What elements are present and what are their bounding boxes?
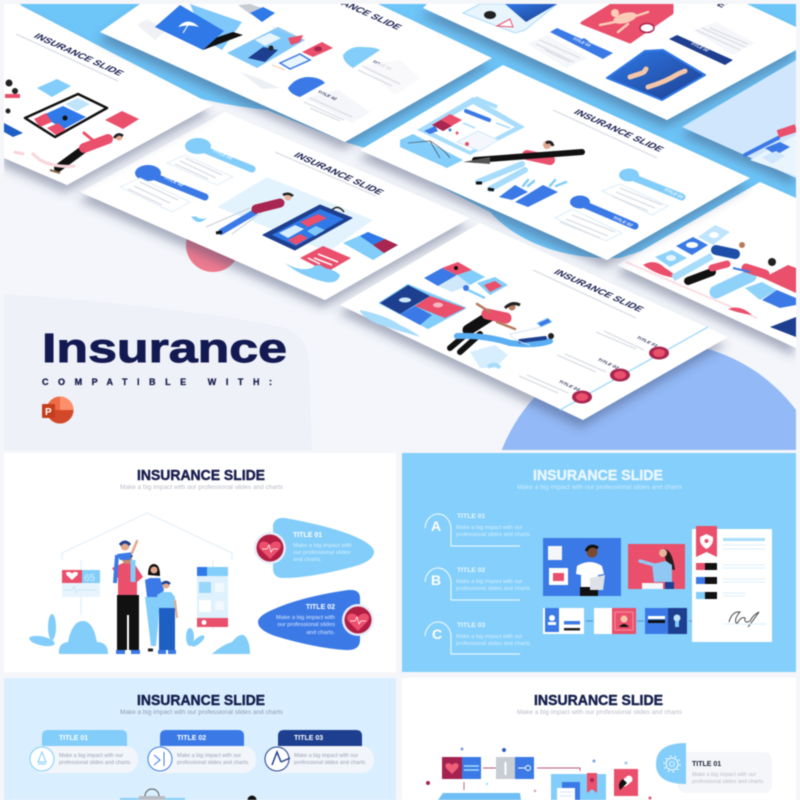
item C: Make a big impact with our [456, 634, 523, 640]
title 01 callout: TITLE 01 [293, 532, 322, 539]
plants [28, 614, 250, 654]
blue hands tile [607, 50, 705, 100]
icon tiles [655, 225, 730, 267]
light blue title bar: TITLE 01 [661, 188, 685, 200]
item B: B [431, 572, 441, 588]
hero panel [3, 3, 797, 451]
slide card: pale blue [682, 60, 796, 178]
right tiles [343, 232, 398, 260]
pink circle [186, 238, 236, 273]
folder with umbrella [155, 4, 243, 50]
title 02 block: TITLE 02 [316, 90, 339, 101]
blue title bar [555, 196, 635, 241]
card title 01: professional slides and charts. [59, 760, 132, 766]
card title 03: Make a big impact with our [294, 753, 358, 759]
signature strip [400, 134, 463, 168]
house outline [62, 513, 232, 630]
card heading: INSURANCE SLIDE [291, 151, 386, 197]
title 01 block: TITLE 01 [692, 761, 721, 768]
timeline: TITLE 03 [556, 380, 581, 392]
title 02 callout [258, 590, 374, 650]
item C [425, 622, 532, 654]
timeline [519, 327, 708, 410]
title 01 block: professional slides and charts. [692, 779, 765, 785]
blue title bar: TITLE 02 [610, 216, 634, 228]
ribbon and tiles [272, 35, 333, 70]
slide card: family tiles [617, 182, 796, 348]
family [112, 541, 177, 654]
title 01 block: Make a big impact with our [692, 772, 756, 778]
icon: gear [664, 756, 680, 772]
small tile cluster [424, 262, 508, 298]
slide: white flow [402, 675, 796, 800]
cloud and sprout [192, 217, 340, 282]
slide card: umbrella folder [100, 0, 492, 142]
navy title bar block: TITLE 02 [689, 42, 711, 52]
card title 02: TITLE 02 [177, 735, 206, 742]
pale title backdrop [4, 294, 312, 450]
title 01 callout: and charts. [293, 557, 322, 563]
slide card: phone and woman [4, 4, 213, 185]
main title: Insurance [42, 325, 287, 371]
timeline: TITLE 02 [595, 358, 620, 370]
signature [724, 612, 766, 627]
slide subheading: Make a big impact with our professional slides and charts [120, 709, 283, 716]
form [417, 97, 525, 155]
blue title bar block [528, 28, 613, 68]
title 01 block [343, 47, 420, 95]
clipboard [263, 205, 352, 250]
large tile cluster [380, 285, 465, 328]
cloud [360, 310, 420, 337]
icon: PowerPoint: P [45, 407, 52, 418]
figure head [248, 796, 256, 800]
phone [25, 94, 107, 137]
warning tile [463, 4, 557, 33]
item B: professional slides and charts. [456, 586, 532, 592]
card title 03: professional slides and charts. [294, 760, 367, 766]
pink squiggle [14, 152, 75, 166]
side figures [5, 80, 20, 114]
right tiles [745, 265, 796, 337]
blue title bar: TITLE 02 [161, 176, 185, 188]
process tiles [543, 608, 709, 634]
blue tile [37, 79, 71, 97]
title 02 callout: Make a big impact with [276, 615, 335, 621]
small top tiles [238, 4, 275, 22]
slide: three titles [4, 678, 396, 800]
icon: heart badge 1 [254, 532, 286, 564]
node 1 [649, 346, 669, 360]
item A [425, 513, 532, 546]
item C: C [432, 626, 442, 642]
shield ribbon [696, 526, 717, 557]
child on shoulders [115, 541, 137, 583]
couple figures [673, 242, 776, 292]
card heading: INSURANCE SLIDE [31, 32, 126, 78]
patient in chair [457, 318, 554, 368]
light blue title bar [602, 168, 685, 215]
man with pen [463, 141, 582, 190]
grey shadow block [138, 20, 164, 40]
title 01 block: TITLE 01 [371, 60, 394, 71]
mother [145, 564, 164, 650]
title 02 callout: and charts. [306, 630, 335, 636]
folder top [438, 793, 521, 800]
slide card: crutches and clipboard [80, 112, 470, 300]
standing woman [50, 133, 123, 173]
title 02 callout: our professional slides [277, 622, 335, 628]
slide heading: INSURANCE SLIDE [533, 467, 663, 484]
card heading: INSURANCE SLIDE [551, 268, 646, 314]
gift boxes [499, 180, 566, 207]
item A: professional slides and charts. [456, 532, 532, 538]
card title 03: TITLE 03 [294, 735, 323, 742]
light blue title bar [167, 138, 252, 185]
red heart tile [105, 111, 139, 129]
app widget [197, 567, 228, 627]
item B: Make a big impact with our [456, 579, 523, 585]
icon: PowerPoint [42, 396, 74, 424]
slide card: pen signature [360, 65, 750, 260]
tile: plus [697, 614, 709, 627]
scattered dots [426, 748, 652, 800]
node 2 [610, 368, 630, 382]
slide card: dentist timeline [340, 223, 728, 420]
pink ground [626, 262, 757, 318]
heart card tile [442, 757, 481, 779]
card title 02: Make a big impact with our [177, 753, 241, 759]
blue title bar [120, 165, 205, 212]
item B: TITLE 02 [457, 567, 486, 574]
item B [425, 567, 532, 600]
tile: face scan [594, 608, 636, 634]
node 3 [572, 390, 592, 404]
card title 01: Make a big impact with our [59, 753, 123, 759]
slide: process blue [402, 453, 796, 672]
title 01 callout: Make a big impact with [293, 543, 352, 549]
heart monitor widget: 65 [84, 573, 96, 584]
slide heading: INSURANCE SLIDE [137, 692, 265, 709]
title 01 block [656, 743, 772, 793]
clipboard top [120, 789, 185, 800]
faint cloud [240, 72, 280, 89]
small blue tile [4, 123, 23, 137]
tile: award [645, 608, 687, 634]
father [112, 554, 143, 654]
slide subheading: Make a big impact with our professional slides and charts [517, 709, 682, 716]
item A: A [431, 518, 441, 534]
slide heading: INSURANCE SLIDE [137, 467, 265, 484]
card title 01: TITLE 01 [59, 735, 88, 742]
title 01 callout: our professional slides [293, 550, 351, 556]
card title 01 [30, 730, 138, 773]
light blue title bar: TITLE 01 [210, 149, 234, 161]
red baby tile [582, 4, 672, 42]
slide: family and house [4, 453, 396, 672]
document with signature [692, 526, 772, 642]
periwinkle circle [501, 348, 796, 450]
blue title bar block: TITLE 03 [571, 37, 593, 47]
red document tile [300, 246, 351, 272]
blue background blob [20, 4, 796, 258]
light blue screen [227, 27, 305, 68]
ribbon [587, 773, 597, 793]
key tile [496, 757, 534, 779]
slide heading: INSURANCE SLIDE [534, 692, 663, 709]
slide subheading: Make a big impact with our professional slides and charts [120, 484, 283, 491]
slide card: baby and hands [423, 0, 796, 120]
panel: man with clipboard [543, 538, 621, 596]
panel: woman at desk [628, 544, 685, 589]
tile: profile [543, 608, 584, 634]
card heading: INSURANCE SLIDE [571, 108, 666, 154]
compatible with label: COMPATIBLE WITH: [42, 377, 272, 387]
card title 02: professional slides and charts. [177, 760, 250, 766]
icon: heart badge 2 [342, 604, 374, 636]
boy [157, 582, 177, 654]
dentist figure [450, 304, 520, 352]
heart monitor widget [62, 570, 100, 597]
card title 03 [265, 730, 374, 773]
timeline: TITLE 01 [634, 336, 659, 348]
pale blue backdrop [217, 177, 373, 252]
slide subheading: Make a big impact with our professional slides and charts [517, 484, 682, 491]
item C: professional slides and charts. [456, 641, 532, 647]
item A: Make a big impact with our [456, 525, 523, 531]
blue document panel [551, 773, 606, 800]
title 02 callout: TITLE 02 [306, 604, 335, 611]
title 01 callout [254, 518, 374, 578]
card title 02 [148, 730, 256, 773]
toggle rows [696, 563, 717, 599]
item A: TITLE 01 [457, 513, 486, 520]
navy title bar block [669, 22, 755, 65]
figure and tiles [745, 128, 796, 176]
title 02 block [288, 77, 370, 123]
woman on crutches [206, 194, 293, 234]
pill tile [614, 769, 638, 796]
item C: TITLE 03 [457, 622, 486, 629]
